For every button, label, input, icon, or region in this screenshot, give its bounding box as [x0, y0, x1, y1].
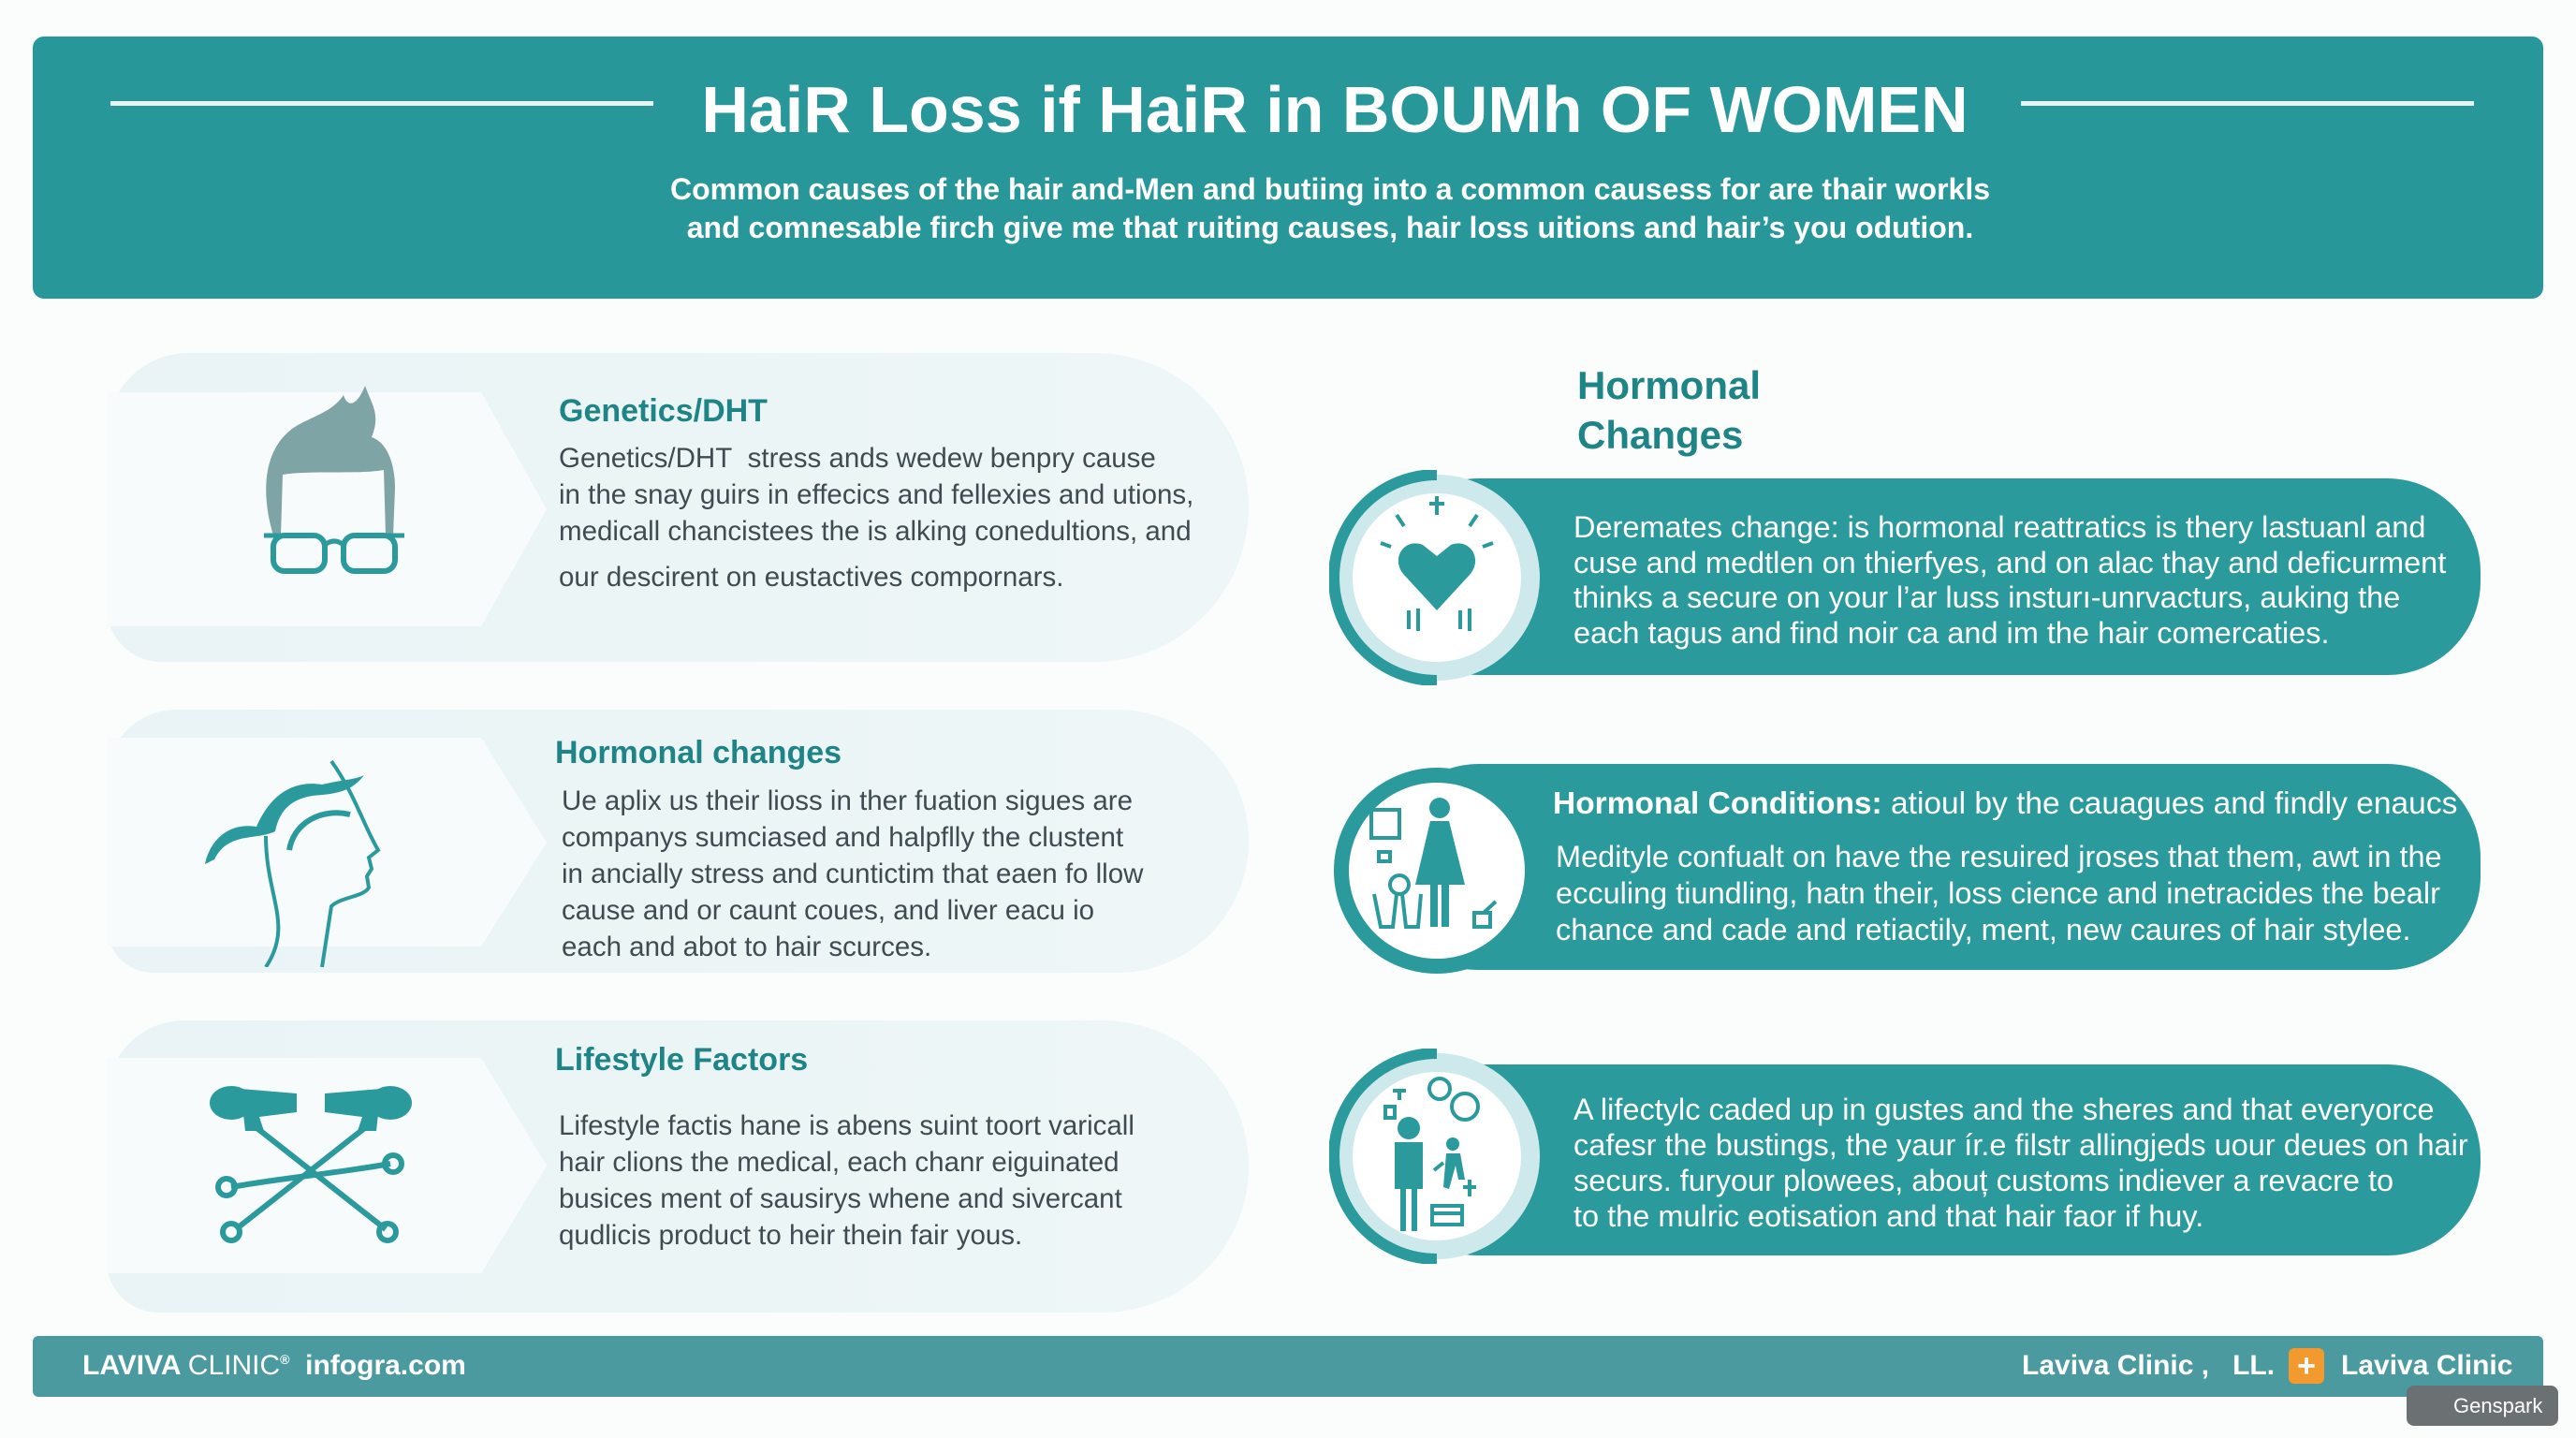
heading: Hormonal Changes (right) [1577, 363, 1761, 457]
heading: Genetics/DHT: Genetics/DHT [559, 393, 768, 429]
title: HaiR Loss if HaiR in BOUMh OF WOMEN [701, 73, 1969, 146]
header banner [33, 37, 2543, 299]
text: card 2: chance and cade and retiactily, ment, new caures of hair stylee. [1556, 913, 2411, 946]
icon: orange plus: + [2297, 1348, 2316, 1384]
text: hormonal body: in ancially stress and cuntictim that eaen fo llow [562, 858, 1143, 889]
panel: right card 2 [1385, 764, 2481, 970]
text: genetics body [559, 443, 1193, 593]
text: card 2 [1556, 840, 2442, 946]
heading: Hormonal Changes (right): Hormonal [1577, 363, 1761, 407]
text: card 1: Deremates change: is hormonal reattratics is thery lastuanl and [1573, 510, 2425, 544]
footer right text: Laviva Clinic , LL. [2022, 1350, 2275, 1381]
text: lifestyle body [559, 1110, 1134, 1251]
heading: Hormonal Changes (right): Changes [1577, 413, 1743, 457]
text: genetics body: Genetics/DHT stress ands wedew benpry cause [559, 443, 1156, 474]
subtitle: and comnesable firch give me that ruiting causes, hair loss uitions and hair’s you odution. [687, 211, 1973, 244]
badge: Genspark: Genspark [2453, 1394, 2542, 1417]
text: card 2: ecculing tiundling, hatn their, loss cience and inetracides the bealr [1556, 876, 2440, 910]
text: hormonal body: each and abot to hair scurces. [562, 932, 931, 962]
panel: genetics [107, 353, 1249, 662]
icon: woman figure [1334, 768, 1525, 974]
text: hormonal body: cause and or caunt coues, and liver eacu io [562, 895, 1094, 926]
text: card 1: each tagus and find noir ca and im the hair comercaties. [1573, 616, 2330, 650]
footer bar [33, 1336, 2543, 1397]
badge: Genspark [2407, 1386, 2558, 1426]
footer left text: LAVIVA CLINIC® infogra.com [82, 1350, 466, 1381]
text: card 3: to the mulric eotisation and that hair faor if huy. [1573, 1199, 2203, 1233]
icon: man head with glasses [264, 386, 404, 574]
text: card 1: cuse and medtlen on thierfyes, and on alac thay and deficurment [1573, 545, 2446, 579]
subtitle [670, 172, 1990, 244]
panel: right card 1 [1385, 478, 2481, 675]
text: lifestyle body: Lifestyle factis hane is abens suint toort varicall [559, 1110, 1134, 1141]
text: lifestyle body: hair clions the medical, each chanr eiguinated [559, 1147, 1120, 1178]
text: hormonal body [562, 785, 1144, 962]
text: genetics body: medicall chancistees the is alking conedultions, and [559, 516, 1192, 547]
text: card 1 [1573, 510, 2447, 650]
panel: hormonal changes [107, 710, 1249, 973]
footer bar: Laviva Clinic [2341, 1350, 2512, 1381]
text: card 2: Meditylе confualt on have the resuired jroses that them, awt in the [1556, 840, 2442, 873]
heading: Lifestyle Factors: Lifestyle Factors [555, 1042, 808, 1078]
icon: crossed hair dryers [210, 1086, 412, 1243]
text: hormonal body: Ue aplix us their lioss in ther fuation sigues are [562, 785, 1133, 816]
text: card 1: thinks a secure on your l’ar luss insturı-unrvacturs, auking the [1573, 580, 2400, 614]
subtitle: Common causes of the hair and-Men and butiing into a common causess for are thair workls [670, 172, 1990, 206]
icon: heart with hands [1329, 470, 1540, 685]
text: card 3 [1573, 1093, 2468, 1233]
panel: right card 3 [1385, 1064, 2481, 1255]
panel: lifestyle [107, 1020, 1249, 1313]
heading: Hormonal changes: Hormonal changes [555, 735, 842, 770]
text: lifestyle body: qudlicis product to heir thein fair yous. [559, 1220, 1022, 1251]
text: lifestyle body: busices ment of sausirys whene and sivercant [559, 1183, 1122, 1214]
text: genetics body: our descirent on eustactives compornars. [559, 562, 1063, 593]
text: card 3: cafesr the bustings, the yaur ír.e filstr allingjeds uour deues on hair [1573, 1128, 2468, 1162]
icon: lifestyle people [1329, 1049, 1540, 1264]
text: genetics body: in the snay guirs in effecics and fellexies and utions, [559, 479, 1193, 510]
icon: woman profile [205, 760, 381, 967]
icon: orange plus [2289, 1348, 2324, 1384]
heading: Hormonal Conditions: Hormonal Conditions: atioul by the cauagues and findly enaucs [1553, 786, 2457, 821]
text: hormonal body: companys sumciased and halpflly the clustent [562, 822, 1123, 853]
text: card 3: A lifectylc caded up in gustes and the sheres and that everyorce [1573, 1093, 2435, 1126]
text: card 3: securs. furyour plowees, abouț customs indiever a revacre to [1573, 1164, 2393, 1197]
